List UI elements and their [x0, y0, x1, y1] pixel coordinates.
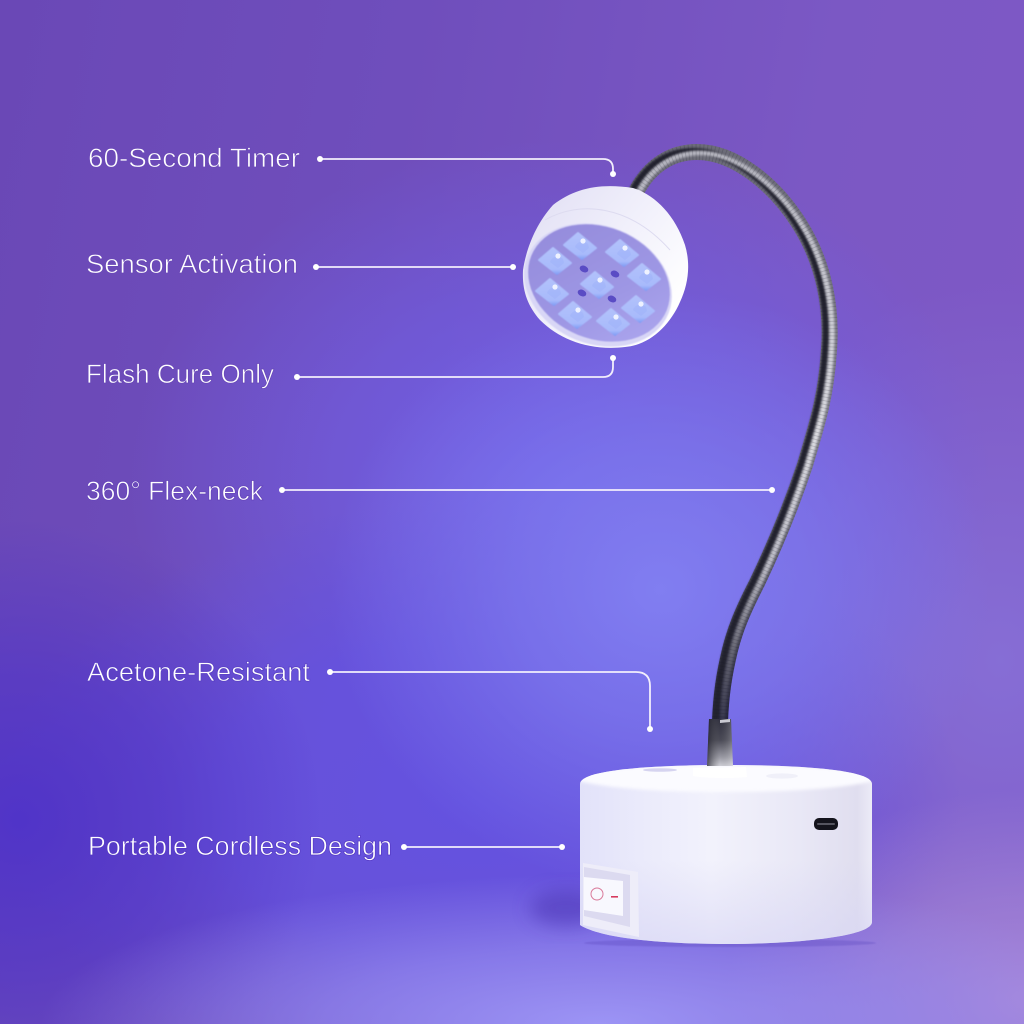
callout: Portable Cordless Design — [88, 831, 565, 861]
callout: Flash Cure Only: Flash Cure Only — [86, 359, 275, 389]
callout: 60-Second Timer — [88, 143, 616, 177]
callout: 60-Second Timer: 60-Second Timer — [88, 143, 300, 173]
lens face — [510, 204, 688, 362]
callout: Portable Cordless Design: Portable Cordless Design — [88, 831, 392, 861]
LED chips — [536, 233, 660, 335]
head housing — [523, 186, 688, 348]
sensor dots — [577, 264, 620, 304]
USB-C port — [814, 818, 838, 830]
housing seam — [545, 209, 670, 250]
neck collar — [707, 719, 733, 766]
rocker switch — [583, 863, 639, 937]
flexible gooseneck — [632, 151, 832, 723]
round base — [570, 719, 882, 944]
neck mount pad — [693, 767, 747, 778]
callout: Acetone-Resistant: Acetone-Resistant — [87, 657, 311, 687]
callout: 360° Flex-neck — [86, 476, 775, 506]
top surface — [570, 765, 882, 792]
top button recess — [643, 768, 677, 772]
infographic canvas — [88, 144, 875, 947]
callout: Acetone-Resistant — [87, 657, 653, 732]
top button — [766, 773, 798, 779]
callout: Flash Cure Only — [86, 355, 616, 389]
callout: 360° Flex-neck: 360° Flex-neck — [86, 476, 264, 506]
lamp head — [505, 186, 691, 368]
callout: Sensor Activation — [86, 249, 516, 279]
lens rim — [505, 202, 691, 368]
callout: Sensor Activation: Sensor Activation — [86, 249, 298, 279]
ground shadow — [530, 890, 876, 947]
